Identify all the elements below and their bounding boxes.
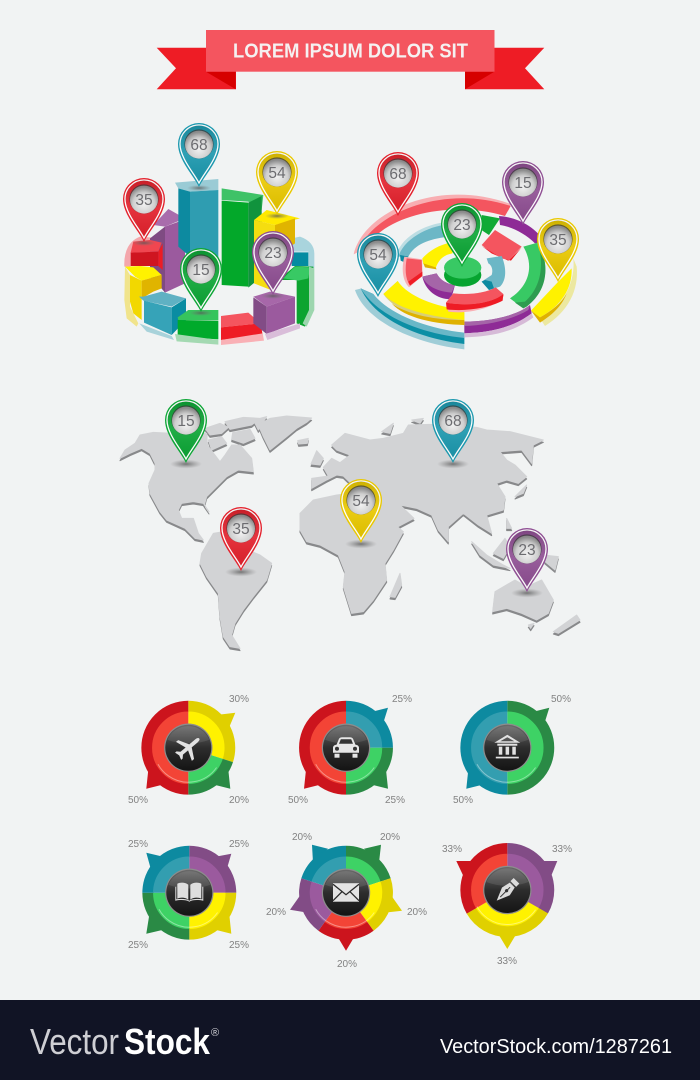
footer logo: ® [211, 1027, 219, 1039]
donut: car 25/25/50 [298, 700, 394, 796]
center cylinder [444, 257, 481, 287]
donut labels: book: 25% [229, 940, 249, 951]
pin 54 teal [357, 233, 399, 297]
donut labels: bank: 50% [453, 795, 473, 806]
bar: yellow back [254, 210, 300, 292]
ring: green arc right [510, 243, 545, 308]
pin 68 teal [178, 123, 220, 187]
map pin 35 red: 35 [232, 521, 250, 538]
ring: outer yellow right [531, 258, 577, 326]
3D circular bar chart [124, 179, 314, 345]
pin shadows [132, 185, 289, 316]
pin 15 green: 15 [192, 262, 210, 279]
donut labels: mail: 20% [266, 907, 286, 918]
ring: outer yellow [383, 281, 464, 325]
donut labels: plane: 20% [229, 795, 249, 806]
ring: green top [482, 215, 500, 235]
donut labels: mail: 20% [337, 959, 357, 970]
map pin 23 purple: 23 [518, 542, 536, 559]
ring: outer teal [355, 288, 464, 349]
bar: red left [131, 240, 163, 270]
pin 54 yellow [256, 151, 298, 215]
footer id: VectorStock.com/1287261 [440, 1036, 672, 1058]
pin 23 purple: 23 [264, 245, 282, 262]
icon: car [333, 737, 359, 758]
donut labels: book: 25% [229, 839, 249, 850]
ring: second teal [397, 222, 453, 263]
pin 35 red: 35 [135, 192, 153, 209]
icon: plane [170, 729, 207, 766]
donut labels: book [128, 839, 249, 951]
bar: purple front [253, 292, 300, 340]
halo: red left [124, 237, 162, 267]
title ribbon: LOREM IPSUM DOLOR SIT [233, 40, 468, 62]
halo: teal right [292, 237, 314, 268]
map pin 23 purple [506, 528, 548, 592]
donut labels: car [288, 694, 412, 806]
ring: outer red [354, 195, 511, 254]
donut labels: car: 25% [392, 694, 412, 705]
map pin shadows [170, 460, 543, 598]
map pin 15 green [165, 399, 207, 463]
ring: small red bottom [446, 287, 504, 312]
donut labels: pen: 33% [497, 956, 517, 967]
donut: bank 50/50 [459, 700, 555, 796]
icon: envelope [333, 883, 359, 902]
donut labels: mail: 20% [380, 832, 400, 843]
pin 68 red: 68 [389, 166, 407, 183]
donut labels: bank [453, 694, 571, 806]
donut labels: pen: 33% [442, 844, 462, 855]
map pin 68 teal: 68 [444, 413, 462, 430]
donut labels: book: 25% [128, 940, 148, 951]
donut labels: pen [442, 844, 572, 967]
pin 15 purple [502, 161, 544, 225]
ring: small teal [482, 256, 505, 290]
donut: pen 33x3 [456, 842, 557, 949]
donut labels: pen: 33% [552, 844, 572, 855]
icon: book [175, 883, 203, 902]
bar: purple back [150, 209, 185, 293]
icon: pen nib [493, 877, 520, 904]
donut labels: mail [266, 832, 427, 970]
donut labels: car: 25% [385, 795, 405, 806]
pin 54 yellow: 54 [268, 165, 286, 182]
pin 23 green [441, 203, 483, 267]
bar: red front [221, 313, 264, 345]
ring: outer purple right [464, 216, 545, 337]
donut labels: car: 50% [288, 795, 308, 806]
pin 68 teal: 68 [190, 137, 208, 154]
pin 15 purple: 15 [514, 175, 532, 192]
map pin 68 teal [432, 399, 474, 463]
pin 35 yellow: 35 [549, 232, 567, 249]
donut labels: plane: 50% [128, 795, 148, 806]
donut labels: book: 25% [128, 839, 148, 850]
donut: book 25x4 [141, 845, 237, 941]
donut labels: bank: 50% [551, 694, 571, 705]
donut labels: mail: 20% [407, 907, 427, 918]
pin 35 red [123, 178, 165, 242]
footer logo: Stock [124, 1021, 211, 1062]
icon: bank [494, 735, 520, 758]
ring: small purple [422, 273, 455, 299]
bar: green front [175, 310, 218, 345]
bar: tall teal [175, 179, 218, 270]
donut labels: plane: 30% [229, 694, 249, 705]
bar: teal right [292, 252, 308, 266]
pin 68 red [377, 152, 419, 216]
donut: mail 20x5 [290, 845, 402, 951]
footer logo [30, 1021, 219, 1062]
pin 54 teal: 54 [369, 247, 387, 264]
ring: small red left [403, 257, 422, 287]
pin 15 green [180, 248, 222, 312]
map pin 54 yellow: 54 [352, 493, 370, 510]
pin 23 purple [252, 231, 294, 295]
footer logo: Vector [30, 1021, 119, 1062]
bar: yellow left [124, 266, 162, 327]
donut labels: mail: 20% [292, 832, 312, 843]
pin 35 yellow [537, 218, 579, 282]
pin 23 green: 23 [453, 217, 471, 234]
concentric ring chart [354, 195, 577, 349]
world map [120, 416, 580, 651]
ring: red upper right [482, 230, 522, 261]
footer bar [0, 1000, 700, 1080]
map pin 15 green: 15 [177, 413, 195, 430]
bar: tall green [222, 188, 263, 288]
map pin 54 yellow [340, 479, 382, 543]
donut labels: plane [128, 694, 249, 806]
bar: teal front [139, 292, 186, 340]
donut: plane 30/20/50 [140, 700, 236, 796]
ring: small yellow [422, 242, 456, 269]
bar: green right [278, 266, 314, 327]
title ribbon [157, 30, 544, 89]
map pin 35 red [220, 507, 262, 571]
